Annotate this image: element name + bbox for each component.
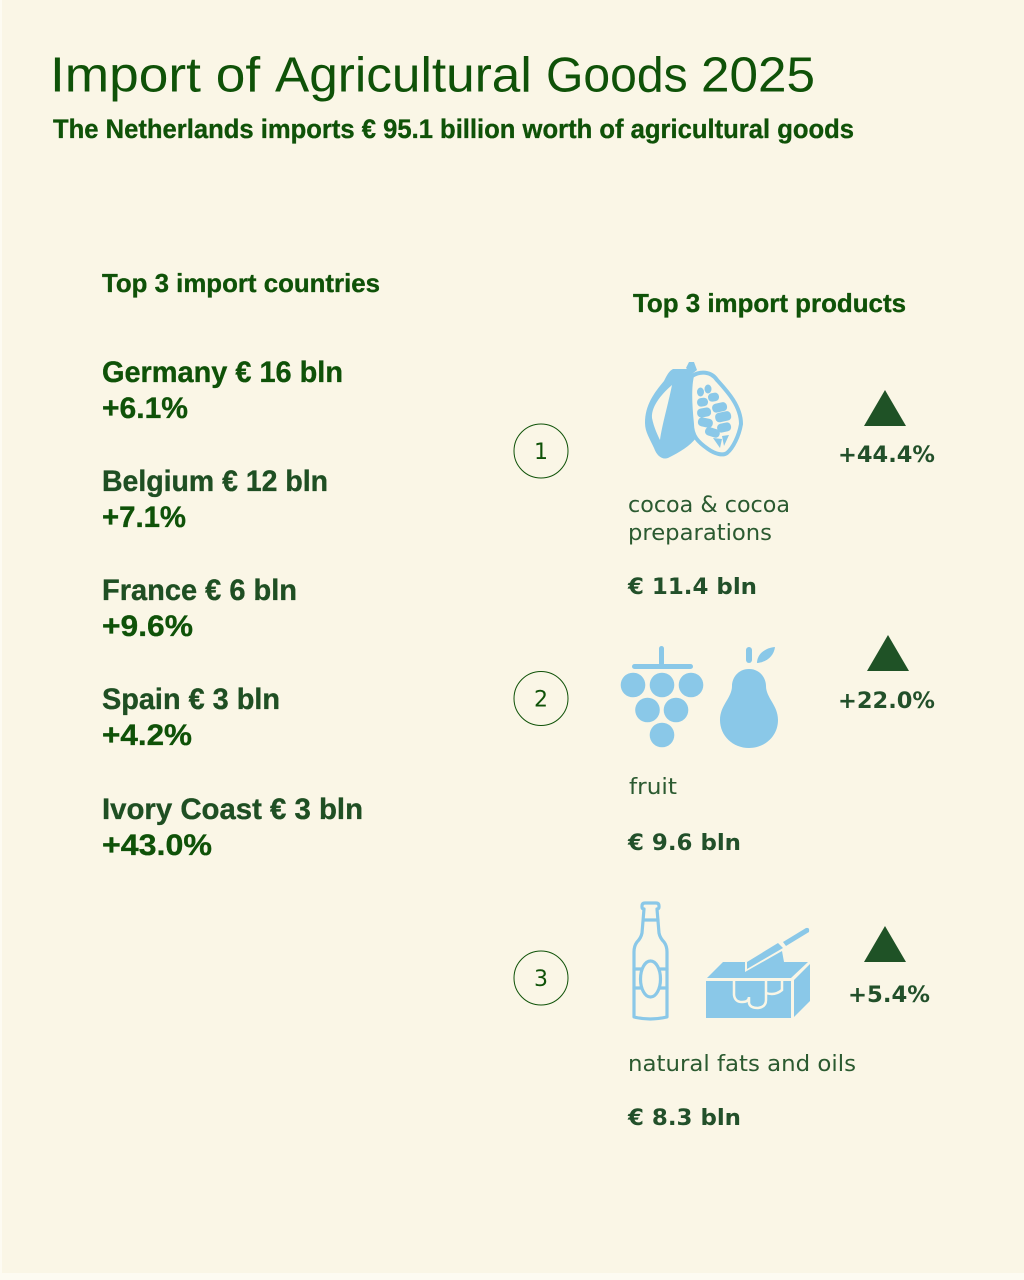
heading: products: Top 3 import products <box>633 288 906 318</box>
rank badge 3 <box>514 951 568 1005</box>
product 1: cocoa <box>514 362 935 600</box>
arrow: up triangle <box>867 635 909 671</box>
country: Belgium: +7.1% <box>102 501 186 534</box>
product value: € 8.3 bln <box>627 1106 741 1131</box>
country: Spain: Spain € 3 bln <box>102 683 280 716</box>
product name: fruit <box>629 775 677 800</box>
rank badge 1 <box>514 424 568 478</box>
country: Germany: Germany € 16 bln <box>102 356 343 389</box>
country: Ivory Coast: Ivory Coast € 3 bln <box>102 793 363 826</box>
product name: natural fats and oils <box>628 1052 856 1077</box>
subtitle: The Netherlands imports € 95.1 billion worth of agricultural goods <box>53 114 854 144</box>
panel: top 3 import countries <box>102 268 380 862</box>
country: Belgium <box>102 465 328 534</box>
rank badge 3: 3 <box>534 967 548 992</box>
title: Import of <box>50 48 275 102</box>
title: Agricultural <box>275 48 546 102</box>
country: Spain: +4.2% <box>102 719 192 752</box>
product value: € 9.6 bln <box>627 831 741 856</box>
country: Belgium: Belgium € 12 bln <box>102 465 328 498</box>
rank badge 1: 1 <box>534 440 548 465</box>
title: 2025 <box>701 48 815 102</box>
country: Ivory Coast <box>102 793 363 862</box>
rank badge 2: 2 <box>534 688 548 712</box>
icon: pear <box>720 647 778 748</box>
title: Goods <box>546 48 701 102</box>
country: Spain <box>102 683 280 752</box>
country: Germany: +6.1% <box>102 392 188 425</box>
product value: € 11.4 bln <box>627 575 757 600</box>
change value: +5.4% <box>848 983 930 1008</box>
heading: countries: Top 3 import countries <box>102 268 380 298</box>
product 2: fruit <box>514 635 935 856</box>
country: France: +9.6% <box>102 610 193 643</box>
icon: grapes <box>621 646 703 747</box>
country: Ivory Coast: +43.0% <box>102 829 212 862</box>
change value: +22.0% <box>838 689 935 714</box>
product name: cocoa & cocoa <box>628 493 790 518</box>
icon: cocoa pod <box>645 362 741 459</box>
country: Germany <box>102 356 343 425</box>
rank badge 2 <box>514 672 568 726</box>
product 3: natural fats and oils <box>514 903 930 1131</box>
icon: oil bottle <box>634 903 667 1019</box>
arrow: up triangle <box>864 926 906 962</box>
country: France <box>102 574 297 643</box>
icon: butter block with knife <box>706 928 810 1018</box>
arrow: up triangle <box>864 390 906 426</box>
change value: +44.4% <box>838 443 935 468</box>
country: France: France € 6 bln <box>102 574 297 607</box>
product name: preparations <box>628 521 772 546</box>
